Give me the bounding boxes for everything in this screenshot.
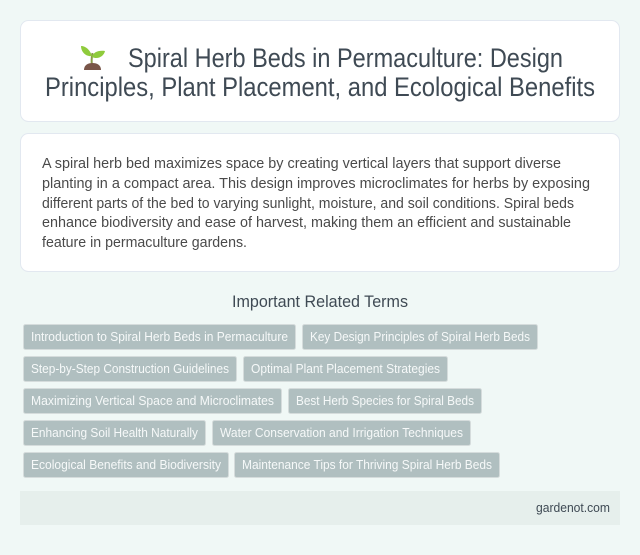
tag bbox=[24, 356, 236, 382]
title: Spiral Herb Beds in Permaculture: Design bbox=[128, 43, 563, 73]
tag: Water Conservation and Irrigation Techniques bbox=[220, 426, 463, 440]
summary text: different parts of the bed to varying sunlight, moisture, and soil conditions. Spiral beds bbox=[42, 196, 574, 212]
tag: Enhancing Soil Health Naturally bbox=[31, 426, 199, 440]
tag bbox=[234, 452, 500, 478]
footer bbox=[20, 491, 620, 525]
tag bbox=[212, 420, 470, 446]
panel: title header bbox=[20, 20, 620, 122]
tag bbox=[24, 388, 282, 414]
summary text: planting in a compact area. This design improves microclimates for herbs by exposing bbox=[42, 176, 590, 192]
tag bbox=[24, 420, 206, 446]
heading: important related terms: Important Related Terms bbox=[232, 293, 408, 311]
tag: Ecological Benefits and Biodiversity bbox=[31, 458, 222, 472]
tag: Introduction to Spiral Herb Beds in Permaculture bbox=[31, 330, 288, 344]
tags list bbox=[24, 324, 538, 478]
tag: Best Herb Species for Spiral Beds bbox=[296, 394, 474, 408]
summary text: A spiral herb bed maximizes space by creating vertical layers that support diverse bbox=[42, 156, 561, 172]
tag: Maximizing Vertical Space and Microclimates bbox=[31, 394, 274, 408]
summary text: feature in permaculture gardens. bbox=[42, 235, 247, 251]
tag: Key Design Principles of Spiral Herb Beds bbox=[310, 330, 530, 344]
tag bbox=[244, 356, 448, 382]
tag bbox=[24, 324, 296, 350]
footer credit: gardenot.com bbox=[536, 501, 610, 515]
tag bbox=[288, 388, 482, 414]
panel: summary bbox=[20, 134, 620, 272]
tag: Step-by-Step Construction Guidelines bbox=[31, 362, 229, 376]
tag: Maintenance Tips for Thriving Spiral Herb Beds bbox=[242, 458, 492, 472]
summary text: enhance biodiversity and ease of harvest, making them an efficient and sustainable bbox=[42, 215, 571, 231]
tag bbox=[302, 324, 538, 350]
title: Principles, Plant Placement, and Ecological Benefits bbox=[45, 72, 595, 102]
tag: Optimal Plant Placement Strategies bbox=[251, 362, 440, 376]
tag bbox=[24, 452, 228, 478]
icon: seedling bbox=[81, 46, 105, 70]
